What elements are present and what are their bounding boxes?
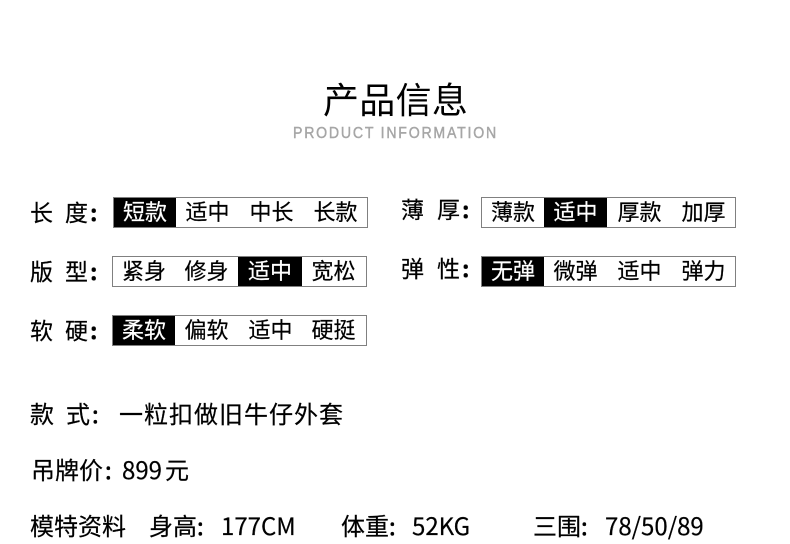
option group: thickness: 薄款 [491,195,535,227]
style line: 款 式: [30,395,99,430]
option group: thickness: 加厚 [681,195,726,227]
option group: fit: 修身 [184,254,228,286]
row label: softness: 软 硬: [30,312,97,346]
option group: fit: 紧身 [122,254,166,286]
model info line: 三围: [533,507,588,542]
style line [30,395,344,430]
model info line: 身高: [149,507,204,542]
option group: elasticity: 无弹 [491,254,535,286]
row label: fit: 版 型: [30,253,97,287]
row label: elasticity: 弹 性: [401,250,469,284]
option group: elasticity: 适中 [617,254,662,286]
option group: thickness: 厚款 [617,195,662,227]
option group: length [113,197,368,228]
option group: length: 短款 [123,195,167,227]
option group: length: 长款 [313,195,358,227]
model info line: 78/50/89 [605,507,704,542]
row label: length: 长 度: [30,194,97,228]
option group: thickness [481,197,736,228]
option group: softness [112,315,367,346]
model info line: 177CM [221,507,296,542]
model info line: 模特资料 [30,507,126,542]
price line: 吊牌价 [31,451,103,486]
option group: fit: 适中 [248,254,292,286]
option group: thickness: 适中 [553,195,598,227]
text: 899元 [122,451,189,486]
subtitle: PRODUCT INFORMATION [293,125,498,142]
option group: softness: 硬挺 [311,313,356,345]
option group: elasticity: 弹力 [681,254,726,286]
option group: softness: 柔软 [122,313,166,345]
row label: thickness: 薄 厚: [401,191,469,225]
option group: fit [112,256,367,287]
option group: length: 中长 [249,195,294,227]
option group: elasticity: 微弹 [553,254,598,286]
text: : [105,451,112,486]
option group: elasticity [481,256,736,287]
option group: softness: 适中 [248,313,292,345]
model info line: 52KG [412,507,470,542]
model info line [30,507,704,542]
option group: softness: 偏软 [184,313,228,345]
option group: fit: 宽松 [311,254,356,286]
price line [31,451,189,486]
option group: length: 适中 [185,195,230,227]
title: 产品信息 [323,72,468,124]
model info line: 体重: [341,507,396,542]
text: 一粒扣做旧牛仔外套 [119,395,344,430]
